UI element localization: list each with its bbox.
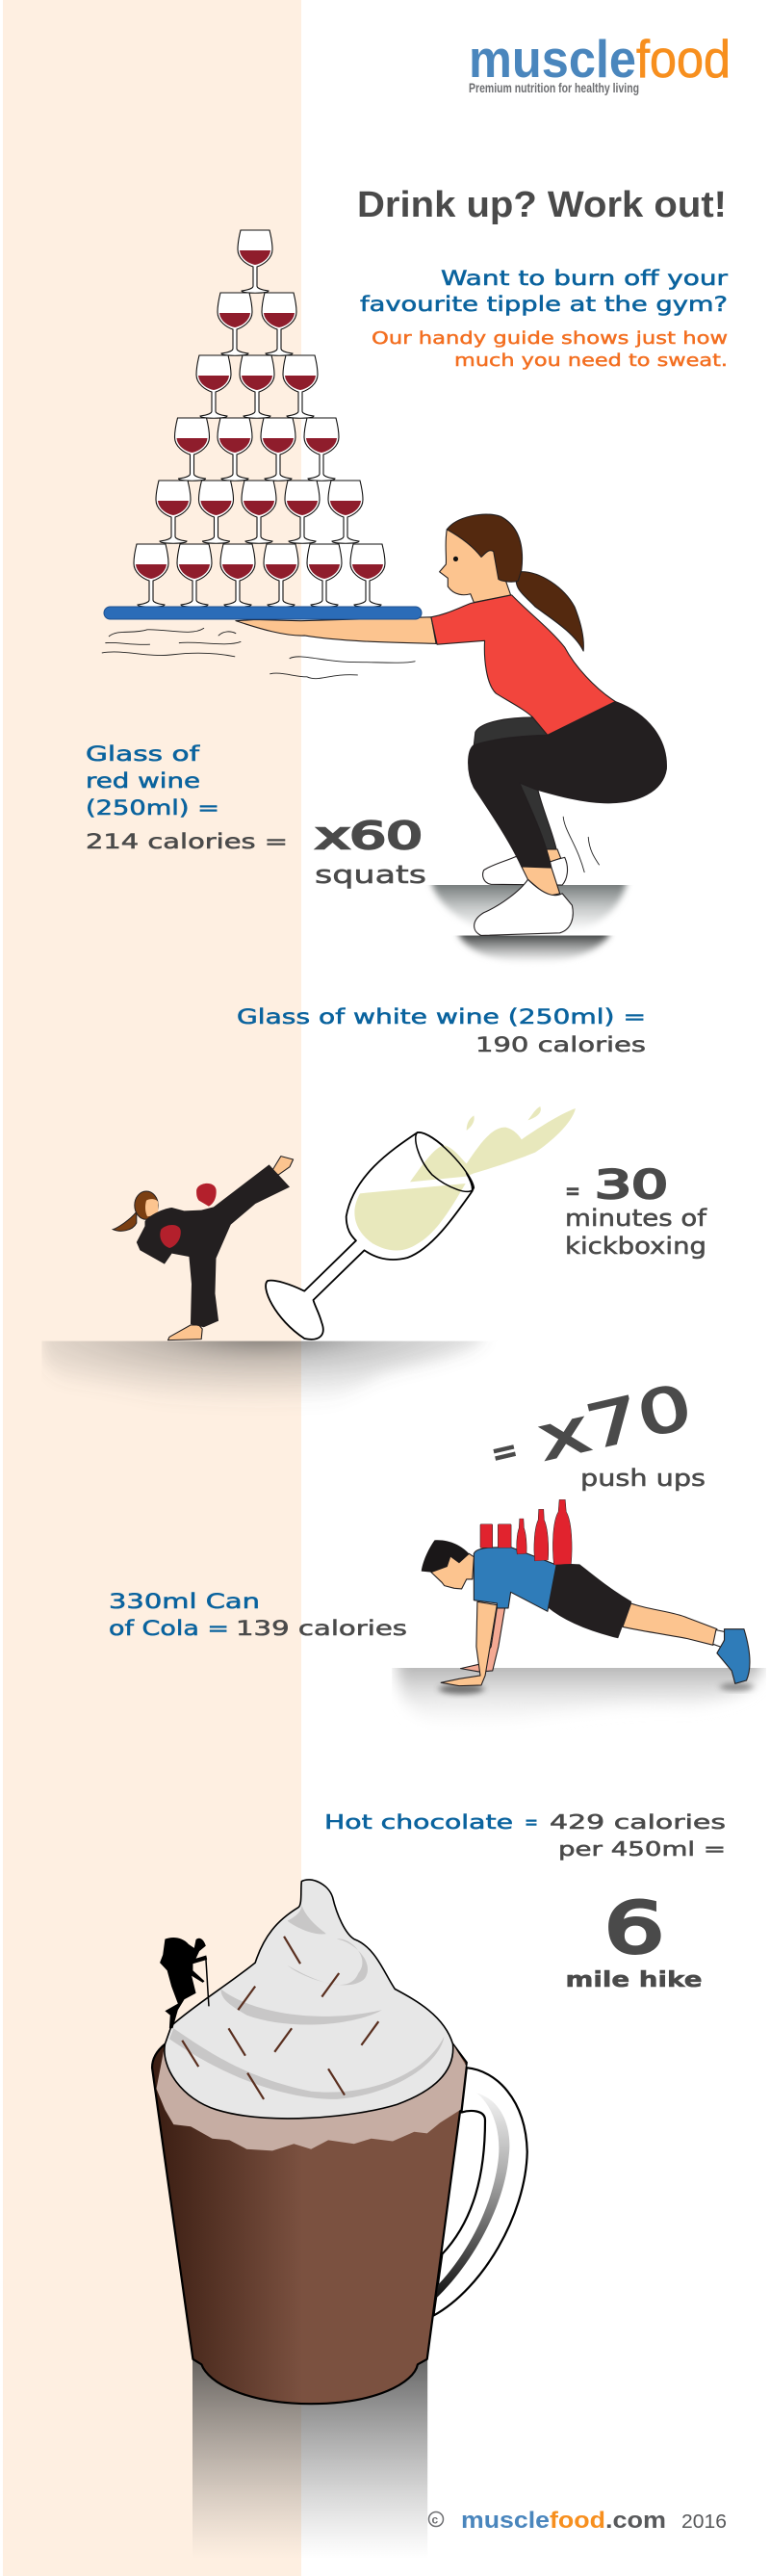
- cola calories text: of Cola =: [109, 1617, 229, 1640]
- white wine calories text: Glass of white wine (250ml) =: [237, 1005, 646, 1028]
- footer copyright: muscle: [461, 2508, 550, 2534]
- red wine calories text: red wine: [86, 769, 200, 793]
- intro question: [360, 267, 728, 316]
- back shoe: [483, 857, 568, 885]
- squatting woman with tray: [102, 514, 666, 962]
- hike result: 6: [604, 1887, 664, 1968]
- footer copyright: 2016: [681, 2511, 727, 2533]
- kickboxing result: [565, 1163, 707, 1260]
- foot shadow: [720, 1683, 754, 1691]
- splash through the glass: [410, 1145, 467, 1182]
- black leggings: [469, 701, 666, 868]
- kickboxer ponytail: [113, 1211, 137, 1231]
- face: [431, 1553, 474, 1589]
- floor shadow behind foot: [427, 885, 630, 928]
- push up man: [398, 1499, 761, 1724]
- logo: musclefood: food: [636, 29, 731, 89]
- chocolate sprinkles: [182, 1937, 378, 2099]
- mug body: [152, 2044, 467, 2404]
- serving tray: [104, 607, 422, 619]
- tipped wine glass: [266, 1132, 473, 1340]
- front shoe: [475, 879, 573, 935]
- footer copyright: .com: [605, 2508, 666, 2534]
- hiker silhouette: [160, 1938, 209, 2028]
- cream swirl shading: [169, 1905, 445, 2099]
- hot chocolate text: [324, 1810, 726, 1860]
- squats count: [315, 815, 426, 890]
- upper boxing glove: [196, 1184, 217, 1207]
- eye: [453, 557, 458, 561]
- back thigh: [474, 717, 548, 745]
- push up count: [487, 1370, 706, 1492]
- arm and hand: [236, 617, 436, 643]
- black gi: [137, 1164, 290, 1327]
- squats count: squats: [315, 861, 426, 890]
- footer copyright: food: [550, 2508, 605, 2534]
- floor shadow under front foot: [454, 936, 614, 963]
- motion lines: [102, 628, 599, 872]
- white wine inside glass: [354, 1184, 466, 1251]
- hair: [447, 514, 523, 582]
- hot chocolate text: Hot chocolate: [324, 1810, 513, 1834]
- push up count: push ups: [580, 1465, 706, 1492]
- standing foot: [167, 1325, 202, 1340]
- squats count: x60: [316, 815, 423, 857]
- footer copyright: [429, 2508, 727, 2534]
- title: Drink up? Work out!: [357, 185, 727, 225]
- hike result: [566, 1887, 703, 1992]
- floor shadow: [42, 1340, 483, 1398]
- hot chocolate text: per 450ml =: [558, 1837, 726, 1860]
- back ankle: [546, 849, 561, 862]
- ponytail: [516, 572, 583, 651]
- hot chocolate text: =: [525, 1810, 538, 1834]
- kickboxing result: kickboxing: [565, 1233, 706, 1260]
- kickboxer face: [145, 1199, 158, 1216]
- hot chocolate text: 429 calories: [550, 1810, 726, 1834]
- raised foot: [271, 1157, 294, 1175]
- handle shading: [435, 2093, 509, 2299]
- kickboxer hair: [135, 1191, 158, 1219]
- face and neck: [440, 530, 511, 603]
- mug shadow: [192, 2359, 427, 2559]
- peach background strip: [3, 0, 301, 2576]
- kickboxing result: =: [565, 1180, 580, 1203]
- back lower leg: [520, 783, 556, 849]
- kickboxing scene: [41, 1106, 576, 1421]
- front lower leg: [522, 867, 560, 897]
- blue shirt: [474, 1548, 556, 1611]
- intro subtext: [372, 328, 728, 371]
- push up count: =: [487, 1430, 522, 1474]
- glass rim: [416, 1132, 474, 1191]
- sock: [713, 1630, 727, 1648]
- cola cans and bottles: [480, 1499, 572, 1565]
- hike result: mile hike: [566, 1968, 703, 1992]
- footer copyright: c: [431, 2513, 439, 2527]
- far arm: [461, 1608, 504, 1672]
- white wine calories text: 190 calories: [475, 1033, 646, 1056]
- red wine calories text: Glass of: [86, 742, 200, 766]
- intro subtext: Our handy guide shows just how: [372, 328, 728, 349]
- red shirt: [431, 595, 615, 735]
- wine droplets: [467, 1106, 541, 1131]
- hot chocolate mug scene: [152, 1880, 527, 2559]
- intro subtext: much you need to sweat.: [454, 351, 728, 371]
- white wine calories text: [237, 1005, 646, 1056]
- intro question: Want to burn off your: [441, 267, 728, 290]
- shorts: [548, 1564, 631, 1638]
- hair: [422, 1540, 469, 1573]
- lower boxing glove: [160, 1225, 181, 1248]
- leg: [623, 1603, 717, 1645]
- mug handle: [433, 2068, 527, 2316]
- kickboxing result: 30: [595, 1163, 668, 1208]
- kickboxing result: minutes of: [565, 1205, 707, 1232]
- floor shadow: [392, 1668, 766, 1714]
- wine glass pyramid: [134, 230, 385, 607]
- hand shadow: [439, 1684, 484, 1694]
- cola calories text: 330ml Can: [109, 1590, 260, 1613]
- logo: musclefood: muscle: [469, 29, 636, 89]
- near arm: [441, 1601, 497, 1686]
- white wine splash: [410, 1108, 576, 1182]
- intro question: favourite tipple at the gym?: [360, 293, 728, 316]
- milk foam band: [156, 2044, 466, 2150]
- push up count: x70: [532, 1370, 698, 1474]
- blue shoe: [717, 1629, 750, 1683]
- logo: musclefood: Premium nutrition for healthy living: [469, 80, 639, 95]
- red wine calories text: [86, 742, 288, 853]
- red wine calories text: 214 calories =: [86, 830, 288, 853]
- red wine calories text: (250ml) =: [86, 796, 219, 820]
- cola calories text: [109, 1590, 407, 1640]
- cola calories text: 139 calories: [236, 1617, 407, 1640]
- logo: musclefood: [469, 29, 731, 95]
- whipped cream: [165, 1880, 453, 2119]
